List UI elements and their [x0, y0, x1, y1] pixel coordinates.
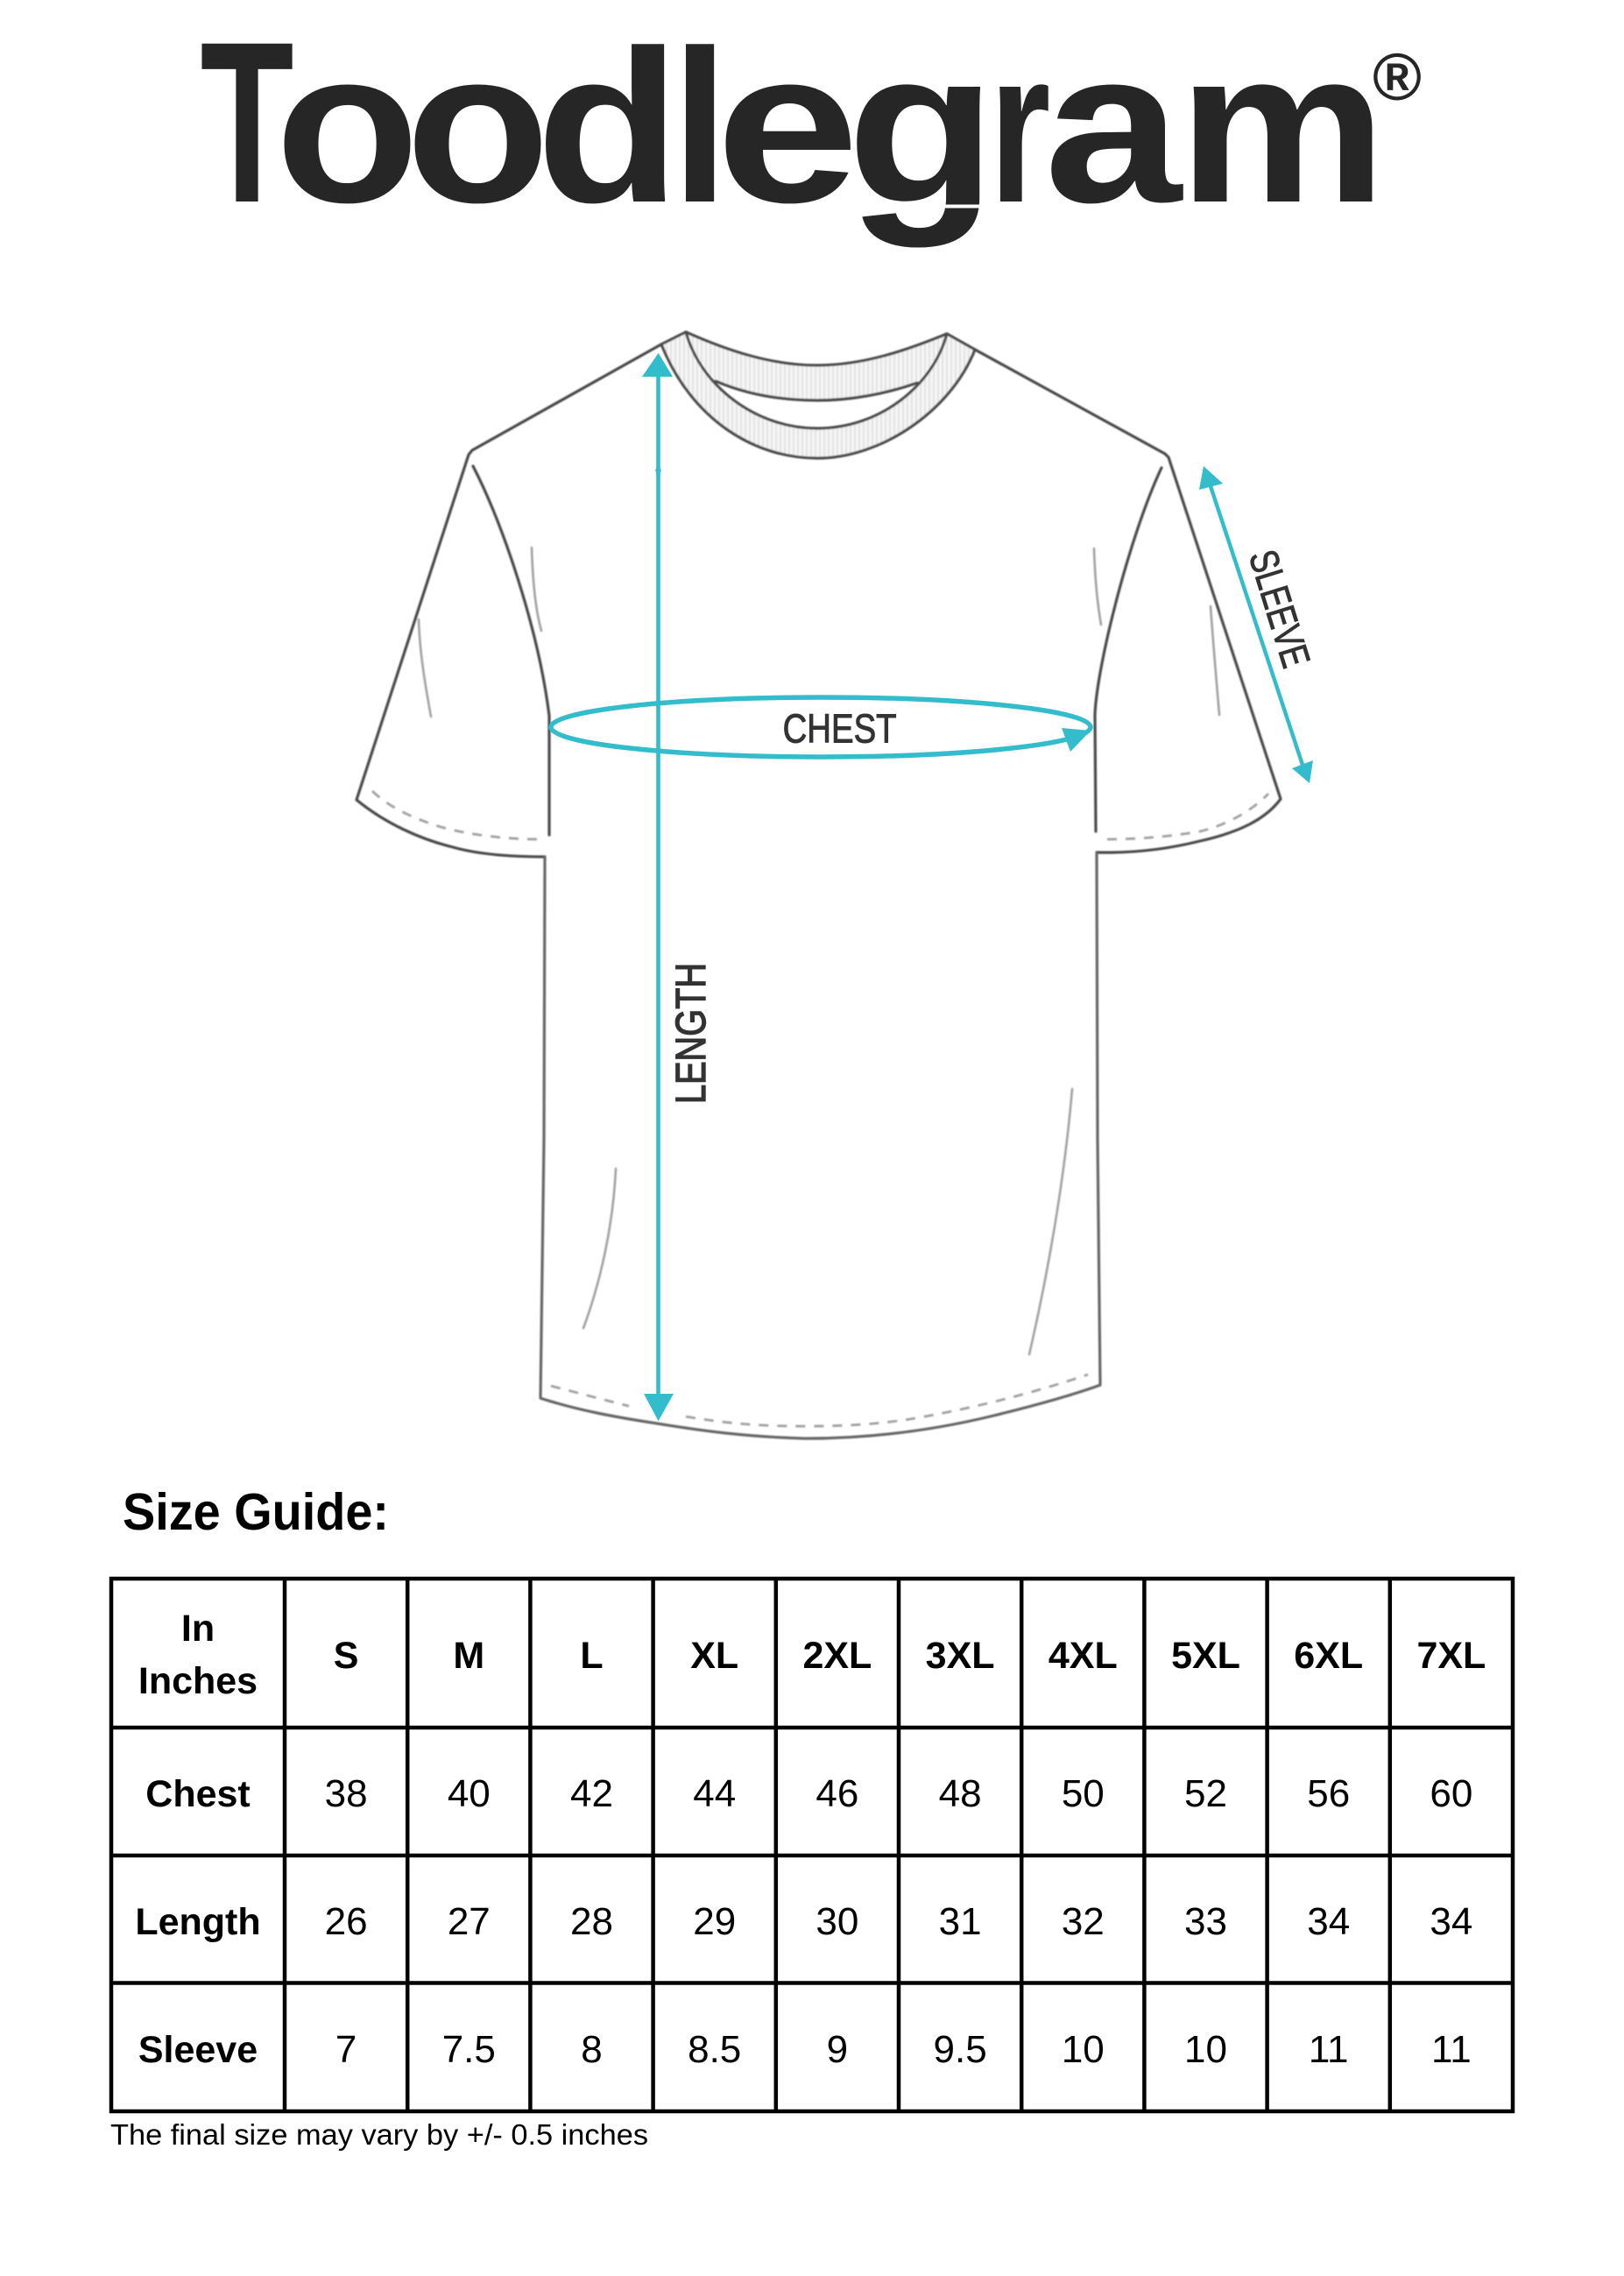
length row: 33	[1184, 1900, 1227, 1943]
fabric wrinkles	[419, 548, 1219, 1354]
chest row: 40	[448, 1772, 491, 1815]
length row: 34	[1307, 1900, 1350, 1943]
header row: Inches	[138, 1660, 258, 1702]
sleeve row: 9.5	[934, 2028, 987, 2071]
logo: Toodlegram wordmark: d	[536, 4, 681, 248]
logo: Toodlegram wordmark: o	[406, 4, 550, 248]
header row: 5XL	[1171, 1635, 1240, 1677]
t-shirt outline	[357, 332, 1281, 1438]
header row: 4XL	[1049, 1635, 1118, 1677]
sleeve row: 8	[581, 2028, 603, 2071]
chest row: 52	[1184, 1772, 1227, 1815]
chest row: 56	[1307, 1772, 1350, 1815]
logo: Toodlegram wordmark: a	[1044, 4, 1183, 248]
chest row	[145, 1772, 1472, 1815]
logo: Toodlegram wordmark: T	[200, 0, 294, 251]
table grid	[111, 1579, 1513, 2111]
length row: 34	[1430, 1900, 1472, 1943]
size table	[111, 1579, 1513, 2111]
sleeve row: Sleeve	[138, 2029, 258, 2071]
sleeve row: 10	[1062, 2028, 1105, 2071]
sleeve row: 11	[1309, 2028, 1349, 2071]
length row: 30	[816, 1900, 858, 1943]
sleeve row: 10	[1184, 2028, 1227, 2071]
logo: Toodlegram wordmark: ®	[1373, 40, 1422, 115]
logo: Toodlegram wordmark	[200, 0, 1422, 251]
chest row: 38	[325, 1772, 368, 1815]
logo: Toodlegram wordmark: e	[716, 4, 859, 248]
sleeve row: 8.5	[688, 2028, 741, 2071]
footnote: The final size may vary by +/- 0.5 inches	[110, 2118, 648, 2151]
chest row: Chest	[145, 1773, 251, 1815]
header row: S	[334, 1635, 358, 1677]
logo: Toodlegram wordmark: r	[989, 4, 1050, 248]
chest row: 46	[816, 1772, 858, 1815]
length row: 26	[325, 1900, 368, 1943]
length row: Length	[135, 1901, 261, 1943]
stitching	[372, 791, 1268, 1426]
length row: 27	[448, 1900, 491, 1943]
header row: 7XL	[1416, 1635, 1486, 1677]
label: SLEEVE: SLEEVE	[1240, 545, 1319, 673]
chest row: 48	[939, 1772, 982, 1815]
logo: Toodlegram wordmark: l	[672, 4, 729, 248]
length row: 32	[1062, 1900, 1105, 1943]
chest row: 50	[1062, 1772, 1105, 1815]
t-shirt measurement diagram	[357, 332, 1319, 1438]
logo: Toodlegram wordmark: o	[275, 4, 420, 248]
chest row: 42	[570, 1772, 613, 1815]
length row	[135, 1900, 1472, 1943]
header row	[138, 1608, 1486, 1702]
sleeve row: 9	[827, 2028, 848, 2071]
sleeve row	[138, 2028, 1472, 2071]
arrow: sleeve	[1199, 466, 1313, 783]
header row: 3XL	[926, 1635, 995, 1677]
heading: Size Guide: Size Guide:	[123, 1483, 389, 1541]
label: LENGTH: LENGTH	[668, 963, 715, 1104]
chest row: 60	[1430, 1772, 1472, 1815]
logo: Toodlegram wordmark: m	[1178, 4, 1387, 248]
header row: L	[580, 1635, 604, 1677]
header row: In	[181, 1608, 215, 1650]
length row: 29	[693, 1900, 736, 1943]
sleeve row: 7	[335, 2028, 357, 2071]
label: CHEST: CHEST	[783, 706, 897, 752]
header row: 6XL	[1294, 1635, 1363, 1677]
header row: XL	[690, 1635, 738, 1677]
sleeve row: 11	[1431, 2028, 1472, 2071]
logo: Toodlegram wordmark: g	[847, 4, 997, 248]
arrow: chest	[551, 697, 1091, 757]
arrow: length	[642, 353, 674, 1421]
header row: 2XL	[802, 1635, 872, 1677]
chest row: 44	[693, 1772, 736, 1815]
header row: M	[453, 1635, 484, 1677]
length row: 31	[939, 1900, 982, 1943]
sleeve row: 7.5	[442, 2028, 496, 2071]
length row: 28	[570, 1900, 613, 1943]
